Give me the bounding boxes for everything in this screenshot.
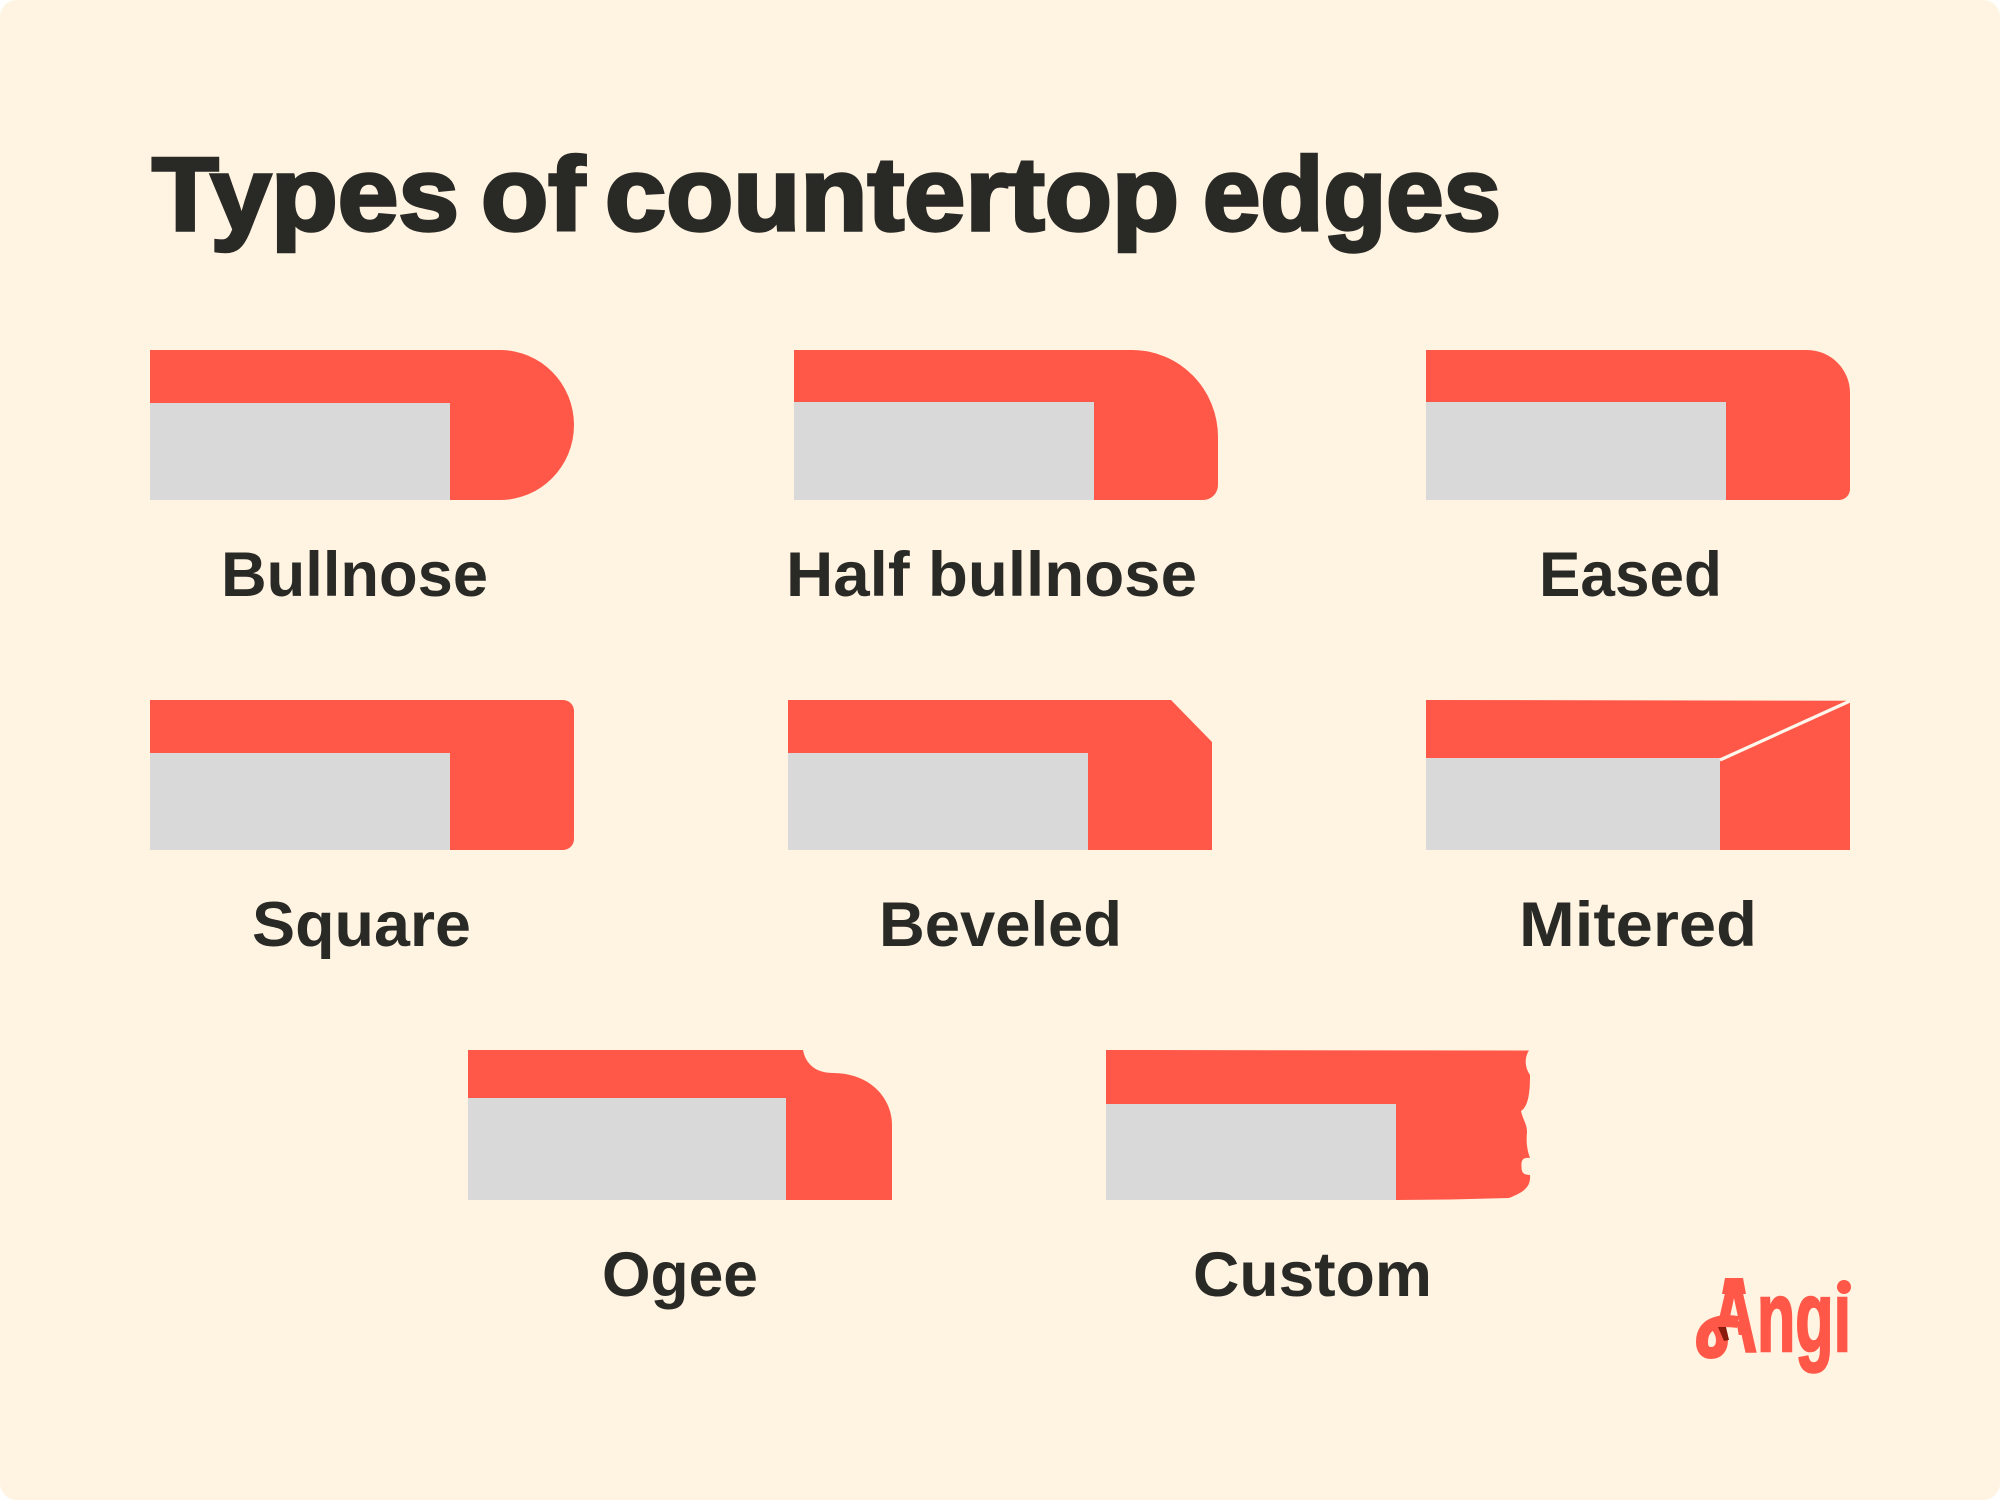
title: edges — [1203, 137, 1501, 253]
panel: bullnose edge — [150, 350, 574, 610]
logo: Angi — [1696, 1261, 1856, 1373]
ogee cabinet base — [468, 1098, 786, 1200]
logo letters ngi: ngi — [1757, 1261, 1851, 1373]
mitered seam line — [1720, 701, 1850, 760]
beveled profile — [788, 700, 1212, 850]
panel: ogee edge — [468, 1050, 892, 1310]
beveled cabinet base — [788, 753, 1088, 850]
title: countertop — [605, 137, 1179, 253]
square cabinet base — [150, 753, 450, 850]
bullnose cabinet base — [150, 403, 450, 500]
logo cut-out under crossbar — [1696, 1325, 1742, 1353]
panel: eased edge — [1426, 350, 1850, 610]
ogee profile — [468, 1050, 892, 1200]
label: Beveled: Beveled — [879, 890, 1122, 960]
panel: custom edge — [1106, 1050, 1530, 1310]
custom cabinet base — [1106, 1104, 1396, 1200]
label: Ogee: Ogee — [602, 1240, 758, 1310]
panel: mitered edge — [1426, 700, 1850, 960]
eased profile — [1426, 350, 1850, 500]
title: of — [481, 137, 585, 253]
panel: half bullnose edge — [786, 350, 1218, 610]
title: Types — [152, 137, 459, 253]
label: Eased: Eased — [1539, 540, 1722, 610]
label: Custom: Custom — [1193, 1240, 1432, 1310]
mitered profile — [1426, 700, 1850, 850]
logo swash loop — [1702, 1321, 1738, 1353]
panel: square edge — [150, 700, 574, 960]
logo i dot cut-out — [1834, 1272, 1856, 1295]
bullnose profile — [150, 350, 574, 500]
label: Bullnose: Bullnose — [221, 540, 488, 610]
half bullnose cabinet base — [794, 402, 1094, 500]
panel: beveled edge — [788, 700, 1212, 960]
mitered cabinet base — [1426, 758, 1720, 850]
square profile — [150, 700, 574, 850]
logo swash shadow — [1718, 1327, 1729, 1341]
label: Half bullnose: Half bullnose — [786, 540, 1197, 610]
logo i dot — [1837, 1280, 1851, 1294]
label: Mitered: Mitered — [1519, 890, 1757, 960]
label: Square: Square — [252, 890, 471, 960]
eased cabinet base — [1426, 402, 1726, 500]
half bullnose profile — [794, 350, 1218, 500]
logo A flat apex — [1722, 1278, 1746, 1294]
title — [152, 137, 1501, 253]
custom profile — [1106, 1050, 1530, 1200]
logo letter A: A — [1711, 1261, 1757, 1373]
